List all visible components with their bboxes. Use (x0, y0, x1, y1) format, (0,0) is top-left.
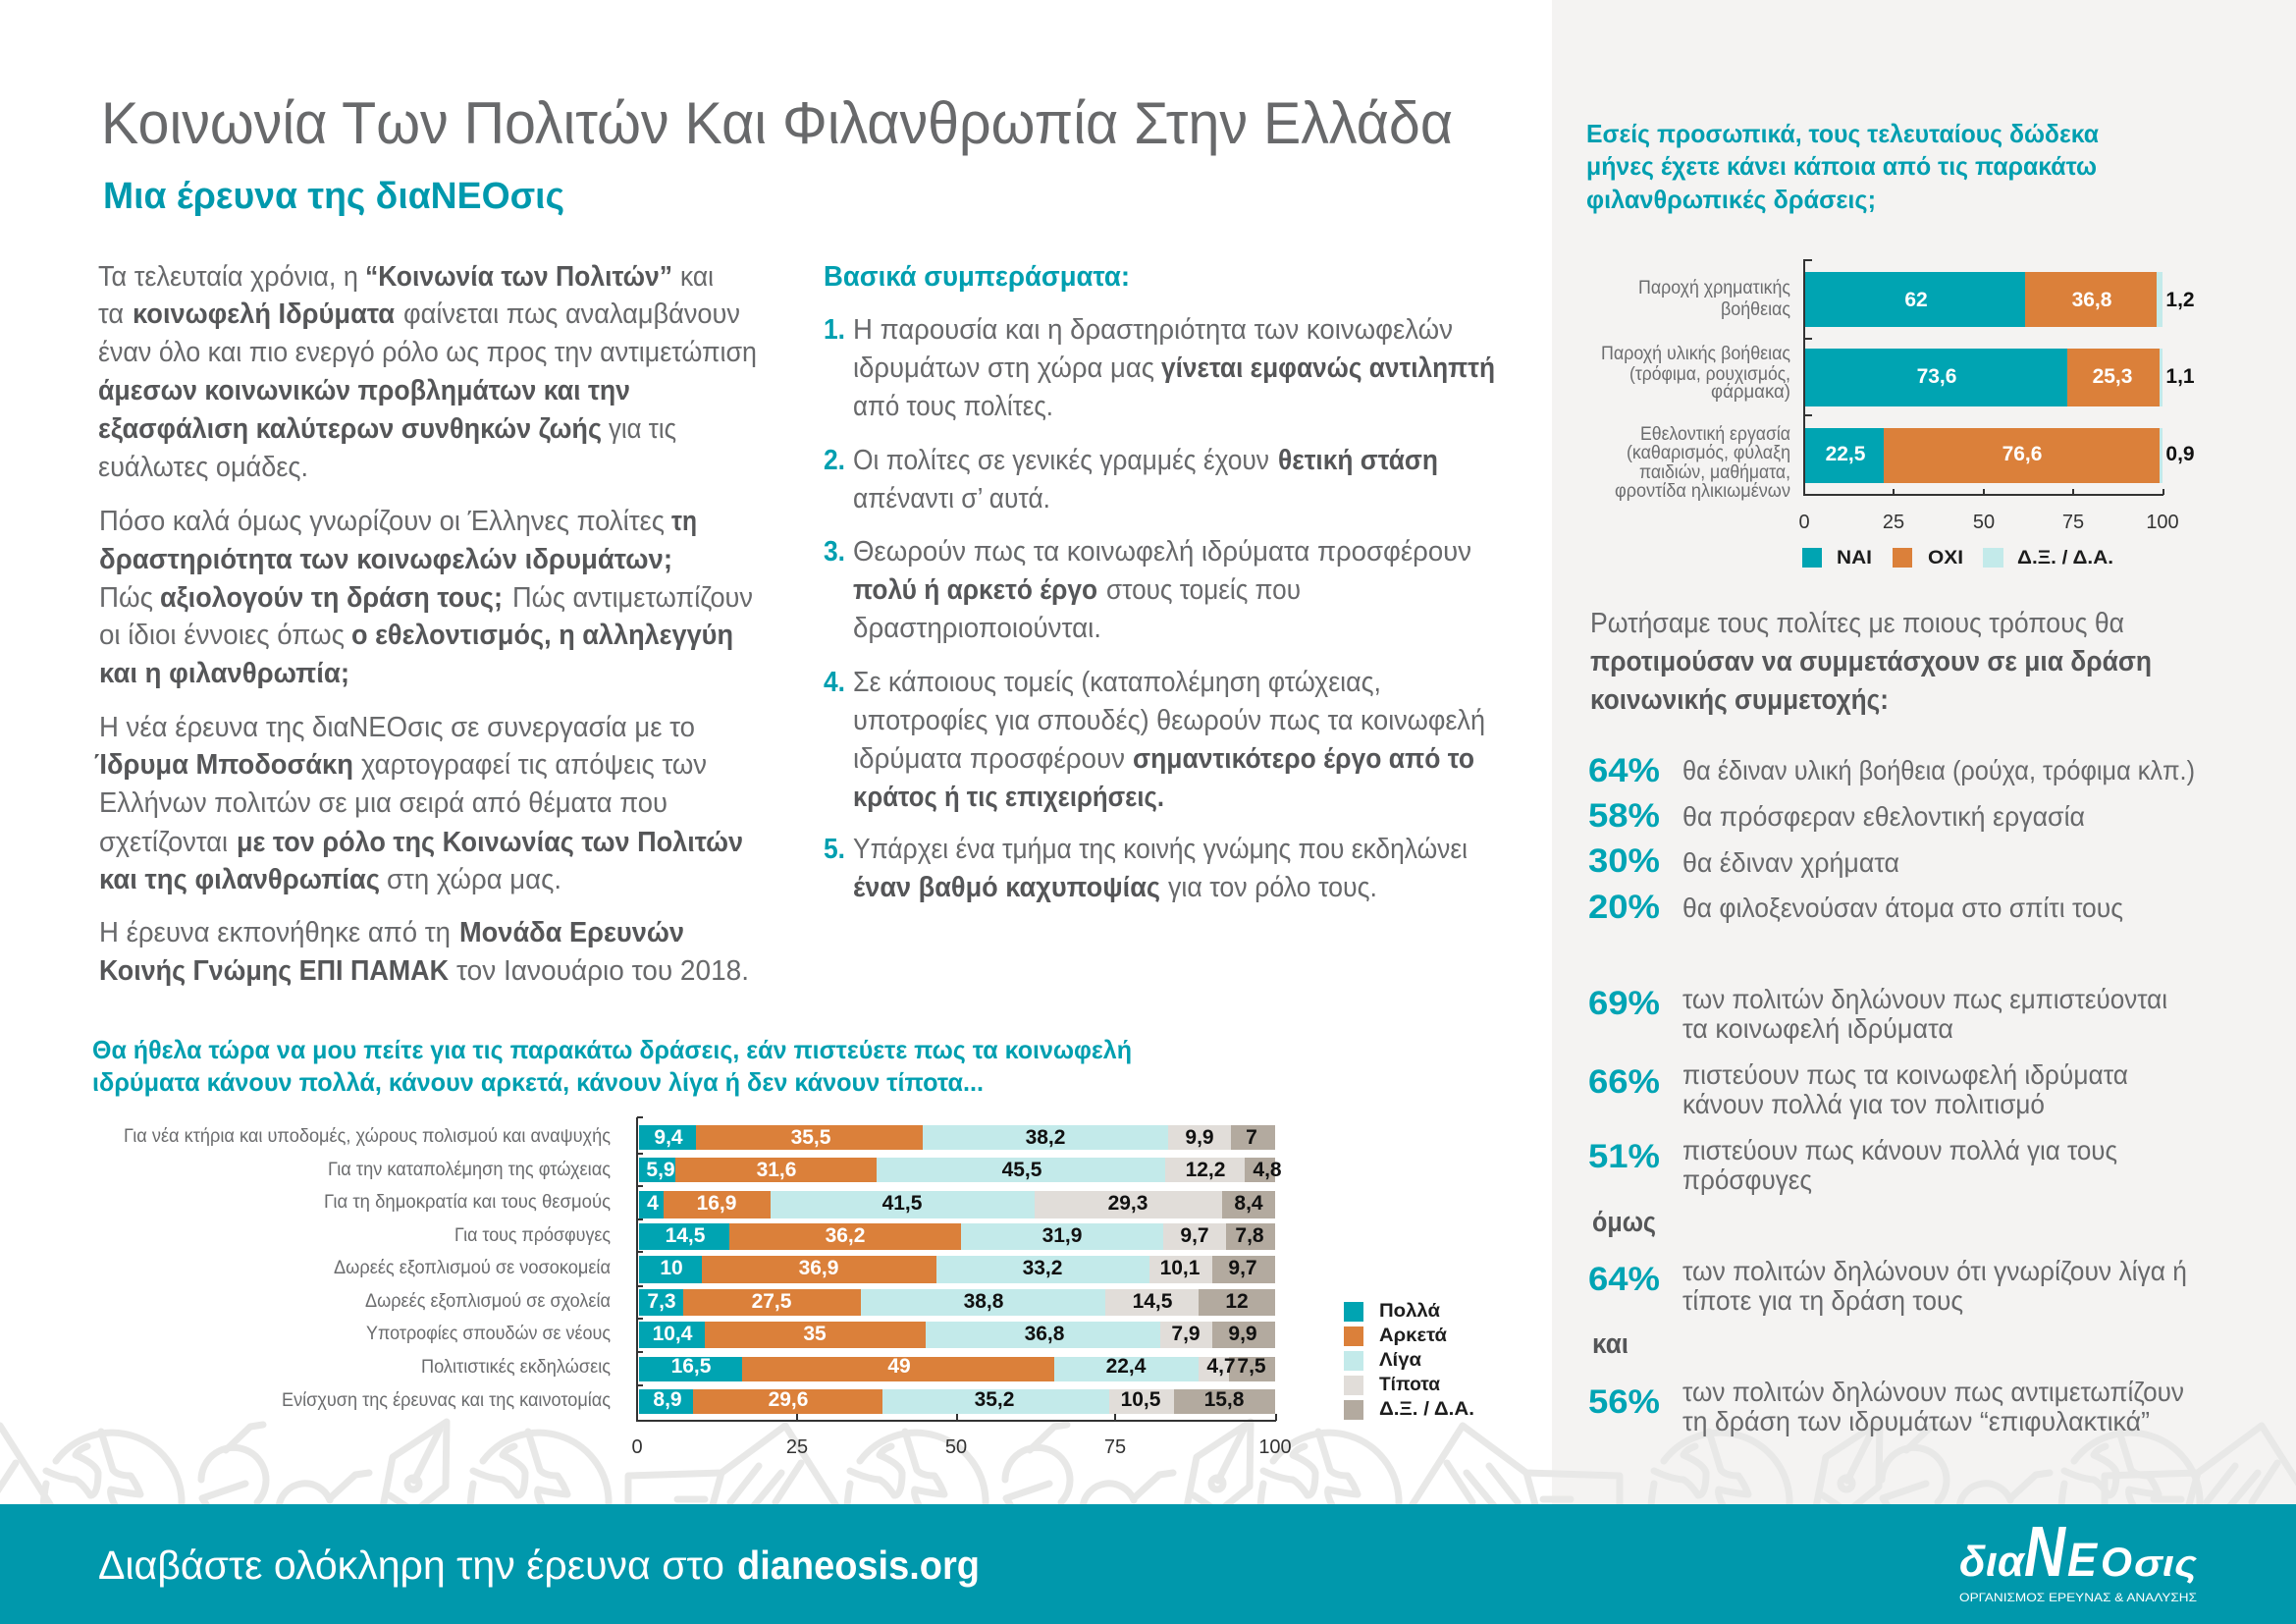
row 8 bar: 4,7 (1206, 1355, 1236, 1378)
row 3 bar: 41,5 (882, 1192, 923, 1215)
chart heading: personal actions question: μήνες έχετε κάνει κάποια από τις παρακάτω (1586, 151, 2097, 181)
row 9 bar: 29,6 (769, 1388, 808, 1411)
row 6 bar: 14,5 (1133, 1290, 1173, 1313)
row 3 bar: 29,3 (1108, 1192, 1148, 1215)
row 2 bar: 4,8 (1253, 1159, 1282, 1181)
row 2 bar: 5,9 (646, 1159, 675, 1181)
x axis labels (1798, 512, 2179, 533)
row 4 bar: 14,5 (666, 1224, 706, 1247)
stat 64% know little: 64% (1588, 1261, 1660, 1298)
paragraph 3: σχετίζονται (99, 827, 228, 858)
paragraph 2: οι ίδιοι έννοιες όπως (99, 620, 345, 651)
row 3 bar: 16,9 (697, 1192, 736, 1215)
conclusion 4: κράτος ή τις επιχειρήσεις. (853, 782, 1164, 813)
x axis labels: 100 (1258, 1436, 1292, 1458)
row 2 bar (639, 1158, 1282, 1182)
connector: όμως: όμως (1592, 1207, 1656, 1238)
logo: διαΝΕΟσις: Ν (2024, 1513, 2067, 1592)
paragraph 1: εξασφάλιση καλύτερων συνθηκών ζωής (98, 413, 602, 445)
paragraph 4: Κοινής Γνώμης ΕΠΙ ΠΑΜΑΚ (99, 955, 449, 987)
conclusion 3: πολύ ή αρκετό έργο (853, 574, 1097, 606)
x axis labels: 50 (1973, 512, 1995, 533)
bar: financial aid: 62 (1904, 289, 1928, 311)
conclusion 5: 5. (824, 834, 845, 865)
paragraph 1: κοινωφελή Ιδρύματα (133, 298, 395, 330)
conclusion 4: Σε κάποιους τομείς (καταπολέμηση φτώχειας, (853, 667, 1381, 698)
row 6 bar: 7,3 (647, 1290, 676, 1313)
text block: preferred participation question: κοινωνικής συμμετοχής: (1590, 684, 1889, 716)
row 9 bar (639, 1388, 1275, 1414)
x axis labels: 100 (2146, 512, 2179, 533)
paragraph 1 (98, 261, 757, 483)
x axis labels: 50 (945, 1436, 967, 1458)
paragraph 2: ο εθελοντισμός, η αλληλεγγύη (351, 620, 733, 651)
text block: preferred participation question: προτιμούσαν να συμμετάσχουν σε μια δράση (1590, 646, 2152, 677)
stat 30% money: 30% (1588, 842, 1660, 880)
conclusion 1: Η παρουσία και η δραστηριότητα των κοινωφελών (853, 314, 1453, 346)
row labels: Υποτροφίες σπουδών σε νέους (366, 1324, 611, 1344)
row labels: Δωρεές εξοπλισμού σε νοσοκομεία (334, 1258, 611, 1278)
x axis labels: 25 (1883, 512, 1904, 533)
conclusion 4: υποτροφίες για σπουδές) θεωρούν πως τα κοινωφελή (853, 705, 1485, 736)
row 7 bar: 7,9 (1171, 1323, 1201, 1345)
paragraph 3: Η νέα έρευνα της διαΝΕΟσις σε συνεργασία με το (99, 712, 695, 743)
logo: διαΝΕΟσις: δια (1959, 1538, 2026, 1586)
conclusion 4: ιδρύματα προσφέρουν (853, 743, 1125, 775)
logo: διαΝΕΟσις: Ε (2067, 1535, 2099, 1587)
row 7 bar: 10,4 (653, 1323, 693, 1345)
bar: material aid: 25,3 (2093, 365, 2132, 388)
row 5 bar: 10,1 (1160, 1257, 1201, 1279)
row labels: (καθαρισμός, φύλαξη (1627, 443, 1790, 463)
row labels: Δωρεές εξοπλισμού σε σχολεία (365, 1291, 611, 1312)
row 7 bar (639, 1322, 1275, 1348)
paragraph 2: τη (671, 506, 697, 537)
logo: διαΝΕΟσις: ΟΡΓΑΝΙΣΜΟΣ ΕΡΕΥΝΑΣ & ΑΝΑΛΥΣΗΣ (1959, 1591, 2197, 1604)
paragraph 3 (94, 712, 743, 895)
legend: personal actions chart (1802, 548, 2113, 568)
logo: διαΝΕΟσις: σις (2134, 1543, 2198, 1585)
footer band (0, 1504, 2296, 1624)
row 4 bar: 9,7 (1180, 1224, 1209, 1247)
stat 66% culture: 66% (1588, 1063, 1660, 1101)
stat 66% culture: κάνουν πολλά για τον πολιτισμό (1682, 1089, 2045, 1119)
legend: actions chart (1344, 1301, 1474, 1420)
row 5 bar: 10 (660, 1257, 683, 1279)
x axis labels: 25 (786, 1436, 808, 1458)
stat 56% cautious (1588, 1377, 2184, 1436)
row 6 bar: 12 (1225, 1290, 1249, 1313)
logo: διαΝΕΟσις (1959, 1513, 2198, 1604)
connector: και: και (1592, 1328, 1629, 1360)
paragraph 2: Πώς (99, 582, 153, 614)
conclusion 4: 4. (824, 667, 845, 698)
stat 64% know little: των πολιτών δηλώνουν ότι γνωρίζουν λίγα ή (1682, 1256, 2187, 1286)
row 8 bar: 7,5 (1237, 1355, 1266, 1378)
paragraph 3: Ίδρυμα Μποδοσάκη (94, 749, 353, 781)
conclusion 3: 3. (824, 536, 845, 568)
row 8 bar: 49 (887, 1355, 911, 1378)
row labels: Πολιτιστικές εκδηλώσεις (421, 1357, 611, 1378)
paragraph 2: και η φιλανθρωπία; (99, 658, 349, 689)
bar: volunteer work: 76,6 (2002, 443, 2042, 465)
axes (1804, 260, 2163, 495)
stat 69% trust (1588, 984, 2167, 1044)
legend: actions chart: Αρκετά (1379, 1326, 1447, 1346)
legend: personal actions chart: ΟΧΙ (1928, 548, 1963, 568)
row labels: Παροχή χρηματικής (1638, 278, 1790, 298)
conclusion 2: απέναντι σ’ αυτά. (853, 483, 1050, 514)
conclusion 2: 2. (824, 445, 845, 476)
row labels: φάρμακα) (1711, 382, 1790, 403)
legend: personal actions chart: ΝΑΙ (1837, 548, 1872, 568)
title: Κοινωνία Των Πολιτών Και Φιλανθρωπία Στην Ελλάδα (101, 90, 1453, 156)
paragraph 1: τα (98, 298, 124, 330)
row 2 bar: 45,5 (1002, 1159, 1042, 1181)
stat 69% trust: 69% (1588, 985, 1660, 1022)
paragraph 1: έναν όλο και πιο ενεργό ρόλο ως προς την αντιμετώπιση (98, 337, 757, 368)
bar: financial aid (1805, 272, 2195, 327)
row 1 bar: 9,9 (1185, 1126, 1214, 1149)
paragraph 3: Ελλήνων πολιτών σε μια σειρά από θέματα που (99, 787, 667, 819)
conclusion 4: σημαντικότερο έργο από το (1133, 743, 1474, 775)
stat 20% hosting (1588, 889, 2123, 926)
x axis labels (631, 1436, 1292, 1458)
row 7 bar: 9,9 (1228, 1323, 1257, 1345)
row 6 bar: 38,8 (964, 1290, 1004, 1313)
stat 51% refugees: 51% (1588, 1138, 1660, 1175)
stat 20% hosting: 20% (1588, 889, 1660, 926)
row 4 bar: 36,2 (826, 1224, 865, 1247)
conclusion 3: στους τομείς που (1106, 574, 1301, 606)
stat 58% volunteer work: 58% (1588, 797, 1660, 835)
row labels: Εθελοντική εργασία (1640, 424, 1790, 445)
conclusion 1: 1. (824, 314, 845, 346)
stat 64% material aid (1588, 752, 2195, 789)
stat 30% money (1588, 842, 1899, 880)
stat 69% trust: τα κοινωφελή ιδρύματα (1682, 1013, 1953, 1044)
bar: financial aid: 36,8 (2072, 289, 2112, 311)
row labels: (τρόφιμα, ρουχισμός, (1629, 364, 1790, 385)
paragraph 1: άμεσων κοινωνικών προβλημάτων και την (98, 375, 630, 406)
bar: financial aid: 1,2 (2165, 289, 2195, 311)
row 5 bar: 9,7 (1228, 1257, 1257, 1279)
conclusion 4 (824, 667, 1485, 813)
row 8 bar (639, 1355, 1275, 1381)
stat 51% refugees: πιστεύουν πως κάνουν πολλά για τους (1682, 1135, 2117, 1165)
stat 30% money: θα έδιναν χρήματα (1682, 847, 1899, 878)
bar: material aid: 73,6 (1917, 365, 1956, 388)
intro text block (94, 261, 757, 987)
footer call to action: dianeosis.org (737, 1543, 980, 1588)
conclusion 3: Θεωρούν πως τα κοινωφελή ιδρύματα προσφέρουν (853, 536, 1471, 568)
row 1 bar: 7 (1246, 1126, 1257, 1149)
row 5 bar: 33,2 (1023, 1257, 1062, 1279)
paragraph 2: αξιολογούν τη δράση τους; (160, 582, 503, 614)
conclusion 5: έναν βαθμό καχυποψίας (853, 872, 1160, 903)
stacked bar chart: personal philanthropic actions (1601, 260, 2195, 533)
paragraph 1: ευάλωτες ομάδες. (98, 452, 308, 483)
row labels (1601, 278, 1790, 502)
stat 66% culture: πιστεύουν πως τα κοινωφελή ιδρύματα (1682, 1059, 2128, 1090)
conclusion 3: δραστηριοποιούνται. (853, 613, 1101, 644)
chart heading: personal actions question: Εσείς προσωπικά, τους τελευταίους δώδεκα (1586, 119, 2099, 148)
row labels (124, 1126, 611, 1411)
row 1 bar: 9,4 (654, 1126, 683, 1149)
bar: volunteer work: 22,5 (1826, 443, 1866, 465)
paragraph 2: δραστηριότητα των κοινωφελών ιδρυμάτων; (99, 544, 672, 575)
row 1 bar: 38,2 (1026, 1126, 1065, 1149)
legend: actions chart: Δ.Ξ. / Δ.Α. (1379, 1399, 1474, 1420)
axes (637, 1117, 1276, 1421)
decorative icon pattern strip (0, 1422, 2296, 1533)
row 1 bar (639, 1125, 1275, 1150)
conclusion 5: για τον ρόλο τους. (1168, 872, 1377, 903)
stat list: trust and awareness (1588, 984, 2187, 1436)
stacked bar chart: foundations' work by sector (124, 1117, 1292, 1458)
x axis labels: 0 (631, 1436, 643, 1458)
subtitle: Μια έρευνα της διαΝΕΟσις (103, 176, 564, 217)
row 3 bar (639, 1191, 1275, 1218)
stat 64% material aid: 64% (1588, 752, 1660, 789)
row 1 bar: 35,5 (791, 1126, 831, 1149)
row labels: Για την καταπολέμηση της φτώχειας (328, 1160, 611, 1180)
paragraph 2: Πώς αντιμετωπίζουν (512, 582, 753, 614)
stat 66% culture (1588, 1059, 2128, 1119)
stat 58% volunteer work (1588, 797, 2085, 835)
conclusion 1: ιδρυμάτων στη χώρα μας (853, 352, 1154, 384)
conclusion 3 (824, 536, 1471, 644)
row labels: Για τους πρόσφυγες (454, 1225, 611, 1246)
row 3 bar: 8,4 (1234, 1192, 1263, 1215)
row labels: Παροχή υλικής βοήθειας (1601, 344, 1790, 364)
conclusion 5 (824, 834, 1468, 903)
row labels: παιδιών, μαθήματα, (1639, 462, 1790, 483)
key conclusions block (824, 261, 1495, 903)
paragraph 4: Μονάδα Ερευνών (459, 917, 684, 948)
paragraph 1: και (680, 261, 714, 293)
conclusion 1: γίνεται εμφανώς αντιληπτή (1161, 352, 1495, 384)
row labels: βοήθειας (1721, 299, 1790, 320)
paragraph 1: για τις (609, 413, 676, 445)
chart heading: personal actions question (1586, 119, 2099, 214)
x axis labels: 0 (1798, 512, 1810, 533)
row 4 bar: 7,8 (1235, 1224, 1264, 1247)
legend: personal actions chart: Δ.Ξ. / Δ.Α. (2017, 548, 2113, 568)
stat 64% know little (1588, 1256, 2187, 1316)
row 3 bar: 4 (647, 1192, 659, 1215)
x axis labels: 75 (2062, 512, 2084, 533)
stat 64% know little: τίποτε για τη δράση τους (1682, 1285, 1963, 1316)
chart heading: actions question (92, 1035, 1132, 1097)
legend: actions chart: Τίποτα (1379, 1375, 1440, 1395)
conclusion 2: Οι πολίτες σε γενικές γραμμές έχουν (853, 445, 1269, 476)
conclusion 2: θετική στάση (1278, 445, 1438, 476)
paragraph 4: Η έρευνα εκπονήθηκε από τη (99, 917, 451, 948)
paragraph 3: με τον ρόλο της Κοινωνίας των Πολιτών (237, 827, 743, 858)
row 9 bar: 8,9 (653, 1388, 682, 1411)
stat 56% cautious: τη δράση των ιδρυμάτων “επιφυλακτικά” (1682, 1406, 2150, 1436)
row 9 bar: 35,2 (975, 1388, 1014, 1411)
row 8 bar: 16,5 (671, 1355, 712, 1378)
stat 64% material aid: θα έδιναν υλική βοήθεια (ρούχα, τρόφιμα κλπ.) (1682, 755, 2195, 785)
paragraph 2 (99, 506, 753, 689)
row labels: φροντίδα ηλικιωμένων (1615, 481, 1790, 502)
legend: actions chart: Λίγα (1379, 1350, 1421, 1371)
bar: volunteer work: 0,9 (2165, 443, 2195, 465)
stat list: participation preferences (1588, 752, 2195, 926)
paragraph 3: χαρτογραφεί τις απόψεις των (361, 749, 707, 781)
x axis labels: 75 (1104, 1436, 1126, 1458)
row 8 bar: 22,4 (1106, 1355, 1147, 1378)
paragraph 3: στη χώρα μας. (387, 864, 561, 895)
logo: διαΝΕΟσις: Ο (2101, 1539, 2132, 1585)
stat 56% cautious: 56% (1588, 1383, 1660, 1421)
paragraph 3: και της φιλανθρωπίας (99, 864, 380, 895)
paragraph 1: φαίνεται πως αναλαμβάνουν (403, 298, 740, 330)
paragraph 1: “Κοινωνία των Πολιτών” (365, 261, 672, 293)
row 9 bar: 10,5 (1121, 1388, 1161, 1411)
stat 69% trust: των πολιτών δηλώνουν πως εμπιστεύονται (1682, 984, 2167, 1014)
paragraph 1: Τα τελευταία χρόνια, η (98, 261, 358, 293)
stat 51% refugees: πρόσφυγες (1682, 1164, 1812, 1195)
stat 56% cautious: των πολιτών δηλώνουν πως αντιμετωπίζουν (1682, 1377, 2184, 1407)
row 2 bar: 31,6 (757, 1159, 796, 1181)
conclusion 5: Υπάρχει ένα τμήμα της κοινής γνώμης που εκδηλώνει (853, 834, 1468, 865)
legend: actions chart: Πολλά (1379, 1301, 1440, 1322)
conclusions heading: Βασικά συμπεράσματα: (824, 261, 1130, 293)
stat 20% hosting: θα φιλοξενούσαν άτομα στο σπίτι τους (1682, 893, 2123, 923)
text block: preferred participation question: Ρωτήσαμε τους πολίτες με ποιους τρόπους θα (1590, 608, 2124, 639)
row labels: Για νέα κτήρια και υποδομές, χώρους πολισμού και αναψυχής (124, 1126, 611, 1147)
right side panel background (1552, 0, 2296, 1504)
row 9 bar: 15,8 (1204, 1388, 1245, 1411)
chart heading: personal actions question: φιλανθρωπικές δράσεις; (1586, 185, 1876, 214)
row 2 bar: 12,2 (1186, 1159, 1225, 1181)
row 6 bar (639, 1289, 1275, 1316)
row 4 bar (639, 1223, 1275, 1250)
row labels: Ενίσχυση της έρευνας και της καινοτομίας (282, 1390, 611, 1411)
stat 51% refugees (1588, 1135, 2117, 1195)
text block: preferred participation question (1590, 608, 2152, 716)
conclusion 1: από τους πολίτες. (853, 391, 1053, 422)
paragraph 4 (99, 917, 749, 987)
row 7 bar: 36,8 (1025, 1323, 1065, 1345)
row 7 bar: 35 (803, 1323, 827, 1345)
row 5 bar: 36,9 (799, 1257, 838, 1279)
row labels: Για τη δημοκρατία και τους θεσμούς (324, 1192, 611, 1213)
conclusion 2 (824, 445, 1438, 514)
stat 58% volunteer work: θα πρόσφεραν εθελοντική εργασία (1682, 801, 2085, 832)
footer call to action: Διαβάστε ολόκληρη την έρευνα στο (98, 1543, 724, 1588)
bar: material aid (1805, 349, 2195, 406)
bar: material aid: 1,1 (2165, 365, 2195, 388)
bar: volunteer work (1805, 428, 2195, 483)
chart heading: actions question: Θα ήθελα τώρα να μου πείτε για τις παρακάτω δράσεις, εάν πιστεύετε πως τα κοινωφελή (92, 1035, 1132, 1064)
conclusion 1 (824, 314, 1495, 422)
row 5 bar (639, 1256, 1275, 1283)
row 6 bar: 27,5 (752, 1290, 792, 1313)
paragraph 4: τον Ιανουάριο του 2018. (456, 955, 749, 987)
paragraph 2: Πόσο καλά όμως γνωρίζουν οι Έλληνες πολίτες (99, 506, 665, 537)
chart heading: actions question: ιδρύματα κάνουν πολλά, κάνουν αρκετά, κάνουν λίγα ή δεν κάνουν τίποτα... (92, 1067, 984, 1097)
row 4 bar: 31,9 (1042, 1224, 1082, 1247)
